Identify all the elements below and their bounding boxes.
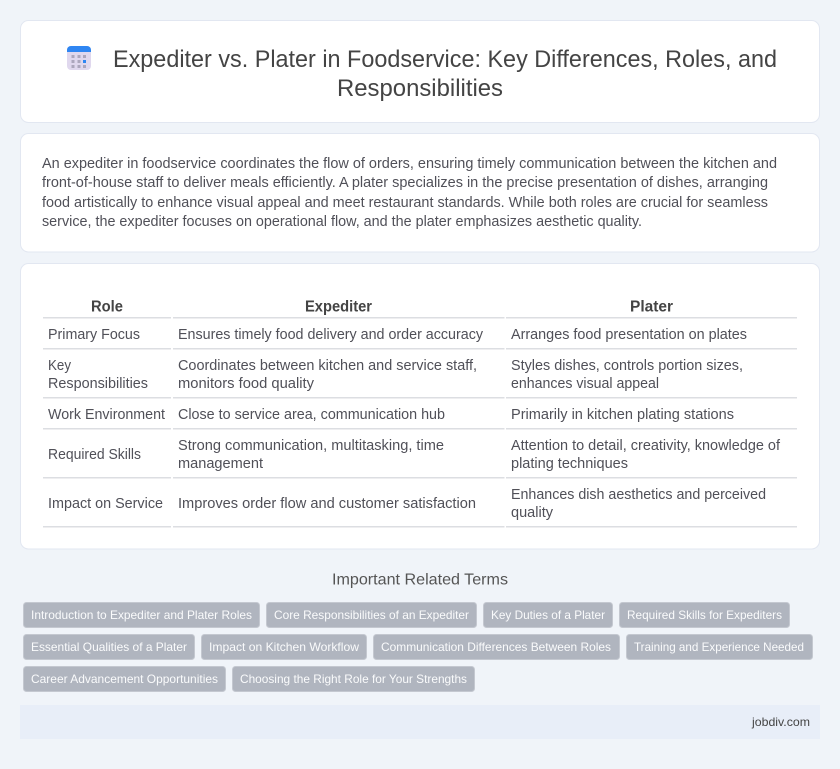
row: required skills: Attention to detail, creativity, knowledge of bbox=[511, 438, 781, 454]
table header: Plater bbox=[630, 298, 673, 316]
table header: Expediter bbox=[305, 298, 372, 316]
row: key responsibilities: Responsibilities bbox=[48, 376, 148, 392]
description text: food artistically to enhance visual appeal and meet restaurant standards. While both roles are crucial for seamless bbox=[42, 195, 768, 211]
row: required skills: management bbox=[178, 456, 263, 472]
row: primary focus: Primary Focus bbox=[48, 327, 140, 343]
related term tags: Core Responsibilities of an Expediter bbox=[274, 608, 469, 622]
related term tags: Training and Experience Needed bbox=[634, 640, 804, 654]
related term tags: Introduction to Expediter and Plater Roles bbox=[31, 608, 252, 622]
title: Responsibilities bbox=[337, 75, 503, 102]
description text bbox=[42, 156, 777, 230]
row: required skills bbox=[48, 438, 781, 472]
title: Expediter vs. Plater in Foodservice: Key Differences, Roles, and bbox=[113, 46, 777, 73]
panel: title card bbox=[20, 20, 820, 122]
heading: important related terms: Important Related Terms bbox=[332, 572, 508, 588]
row: primary focus: Ensures timely food delivery and order accuracy bbox=[178, 327, 484, 343]
row: required skills: Required Skills bbox=[48, 447, 141, 463]
row: primary focus: Arranges food presentation on plates bbox=[511, 327, 747, 343]
footer bbox=[20, 705, 820, 739]
table header bbox=[91, 298, 673, 316]
related term tags: Communication Differences Between Roles bbox=[381, 640, 611, 654]
row: impact on service: Enhances dish aesthetics and perceived bbox=[511, 487, 766, 503]
row: impact on service: quality bbox=[511, 505, 554, 521]
row: key responsibilities: Coordinates between kitchen and service staff, bbox=[178, 358, 477, 374]
footer: jobdiv.com bbox=[751, 715, 810, 729]
panel: comparison table bbox=[20, 264, 820, 549]
row: work environment bbox=[48, 407, 734, 423]
related term tags: Required Skills for Expediters bbox=[627, 608, 782, 622]
table header: Role bbox=[91, 298, 123, 316]
row: required skills: plating techniques bbox=[511, 456, 628, 472]
row: key responsibilities bbox=[48, 358, 743, 392]
icon: calendar bbox=[67, 46, 91, 70]
row: key responsibilities: monitors food quality bbox=[178, 376, 315, 392]
panel: description bbox=[20, 134, 820, 252]
row: key responsibilities: Styles dishes, controls portion sizes, bbox=[511, 358, 743, 374]
row: key responsibilities: enhances visual appeal bbox=[511, 376, 659, 392]
title bbox=[113, 46, 777, 102]
related term tags: Key Duties of a Plater bbox=[491, 608, 605, 622]
row: key responsibilities: Key bbox=[48, 358, 72, 374]
row: impact on service: Improves order flow and customer satisfaction bbox=[178, 496, 476, 512]
description text: front-of-house staff to deliver meals efficiently. A plater specializes in the precise presentation of dishes, arranging bbox=[42, 175, 768, 191]
related term tags bbox=[24, 602, 812, 692]
row: impact on service bbox=[48, 487, 766, 521]
related term tags: Essential Qualities of a Plater bbox=[31, 640, 187, 654]
related term tags: Career Advancement Opportunities bbox=[31, 672, 218, 686]
row: work environment: Primarily in kitchen plating stations bbox=[511, 407, 734, 423]
description text: service, the expediter focuses on operational flow, and the plater emphasizes aesthetic quality. bbox=[42, 214, 642, 230]
row: work environment: Work Environment bbox=[48, 407, 165, 423]
related term tags: Impact on Kitchen Workflow bbox=[209, 640, 359, 654]
row: impact on service: Impact on Service bbox=[48, 496, 163, 512]
row: work environment: Close to service area, communication hub bbox=[178, 407, 445, 423]
related term tags: Choosing the Right Role for Your Strengths bbox=[240, 672, 467, 686]
row: required skills: Strong communication, multitasking, time bbox=[178, 438, 444, 454]
row: primary focus bbox=[48, 327, 747, 343]
description text: An expediter in foodservice coordinates the flow of orders, ensuring timely communication between the kitchen and bbox=[42, 156, 777, 172]
